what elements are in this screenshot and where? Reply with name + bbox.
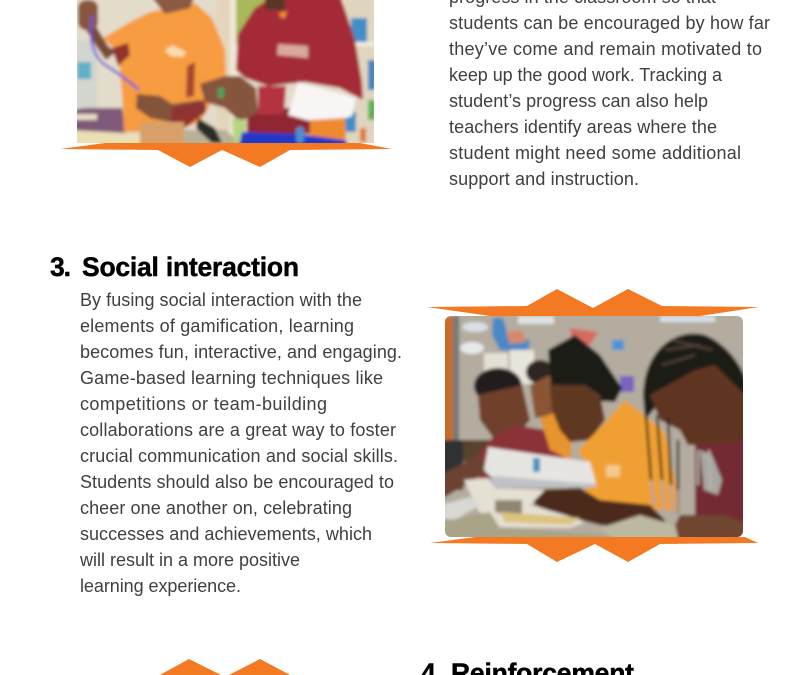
ribbon: orange chevrons above second photo <box>427 289 759 316</box>
text block: social interaction paragraph: By fusing social interaction with the <box>80 290 362 310</box>
book <box>484 447 596 484</box>
text block: progress tracking paragraph: they’ve come and remain motivated to <box>449 39 762 59</box>
photo: students reading books in class <box>440 310 750 545</box>
text block: social interaction paragraph: will result in a more positive <box>79 550 300 570</box>
text block: social interaction paragraph: collaborations are a great way to foster <box>80 420 396 440</box>
boy <box>474 368 522 404</box>
ribbon: orange chevrons below first photo <box>60 143 392 167</box>
text block: social interaction paragraph: learning experience. <box>80 576 241 596</box>
girl two <box>693 438 743 525</box>
text block: progress tracking paragraph <box>449 0 770 189</box>
girl one <box>546 334 624 404</box>
text block: social interaction paragraph: crucial communication and social skills. <box>80 446 398 466</box>
text block: social interaction paragraph: becomes fun, interactive, and engaging. <box>80 342 402 362</box>
text block: social interaction paragraph: Game-based learning techniques like <box>80 368 383 388</box>
text block: progress tracking paragraph: teachers identify areas where the <box>449 117 717 137</box>
heading: 3. Social interaction: Social interaction <box>82 252 299 282</box>
text block: social interaction paragraph <box>79 290 402 596</box>
text block: social interaction paragraph: elements of gamification, learning <box>80 316 354 336</box>
text block: progress tracking paragraph: student might need some additional <box>449 143 741 163</box>
text block: progress tracking paragraph: keep up the good work. Tracking a <box>449 65 723 85</box>
orange shirt <box>103 3 226 132</box>
text block: progress tracking paragraph: student’s progress can also help <box>449 91 708 111</box>
ribbon: orange chevrons above third photo <box>158 659 292 675</box>
photo: two students threading a pipe cleaner <box>70 0 380 150</box>
text block: social interaction paragraph: Students should also be encouraged to <box>80 472 394 492</box>
text block: social interaction paragraph: cheer one another on, celebrating <box>80 498 352 518</box>
text block: progress tracking paragraph: students can be encouraged by how far <box>449 13 770 33</box>
ribbon: orange chevrons below second photo <box>430 537 758 562</box>
red jacket <box>236 0 363 100</box>
heading: 3. Social interaction: 3. <box>50 252 71 282</box>
second child <box>526 360 554 384</box>
text block: progress tracking paragraph: support and instruction. <box>449 169 639 189</box>
text block: social interaction paragraph: competitions or team-building <box>80 394 327 414</box>
text block: social interaction paragraph: successes and achievements, which <box>80 524 372 544</box>
